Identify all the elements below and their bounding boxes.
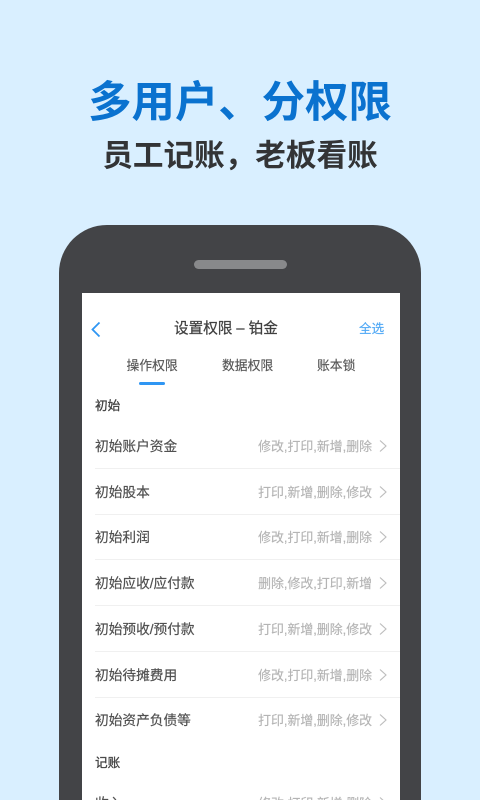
- row: initial deferred expenses: 修改,打印,新增,删除: [258, 668, 372, 683]
- row: initial profit: [95, 530, 400, 560]
- row: initial account funds: 初始账户资金: [95, 439, 177, 454]
- phone speaker: [194, 260, 287, 269]
- phone body: [59, 225, 421, 800]
- row: initial assets and liabilities: [95, 713, 387, 728]
- row: initial advance receipts and payments: 打印,新增,删除,修改: [258, 622, 372, 637]
- section heading: initial: 初始: [95, 399, 120, 413]
- row: initial profit: 初始利润: [95, 530, 150, 545]
- row: initial receivables and payables: 删除,修改,打印,新增: [258, 576, 372, 591]
- phone screen: [82, 293, 400, 800]
- subtitle: 员工记账，老板看账: [102, 139, 378, 173]
- row: initial receivables and payables: [95, 576, 400, 606]
- section heading: bookkeeping: 记账: [95, 756, 120, 770]
- row: initial advance receipts and payments: [95, 622, 400, 652]
- row: initial profit: 修改,打印,新增,删除: [258, 530, 372, 545]
- row: initial assets and liabilities: 初始资产负债等: [95, 713, 191, 728]
- row: initial assets and liabilities: 打印,新增,删除,修改: [258, 713, 372, 728]
- icon: back arrow: [91, 322, 100, 338]
- row: initial advance receipts and payments: 初始预收/预付款: [95, 622, 195, 637]
- row: initial share capital: [95, 485, 400, 515]
- tab: ledger lock: 账本锁: [317, 358, 355, 373]
- active tab indicator: [139, 382, 165, 385]
- row: income: [95, 796, 384, 800]
- row: initial share capital: 打印,新增,删除,修改: [258, 485, 372, 500]
- tab: data permissions: 数据权限: [222, 358, 273, 373]
- screen header title: 设置权限 – 铂金: [174, 321, 278, 337]
- tab: operation permissions: 操作权限: [126, 358, 178, 373]
- title: 多用户、分权限: [88, 79, 392, 127]
- row: initial deferred expenses: 初始待摊费用: [95, 668, 177, 683]
- row: initial account funds: [95, 439, 400, 469]
- row: initial account funds: 修改,打印,新增,删除: [258, 439, 372, 454]
- select all link: 全选: [359, 322, 384, 336]
- row: initial receivables and payables: 初始应收/应付款: [95, 576, 195, 591]
- row: initial share capital: 初始股本: [95, 485, 150, 500]
- row: initial deferred expenses: [95, 668, 400, 698]
